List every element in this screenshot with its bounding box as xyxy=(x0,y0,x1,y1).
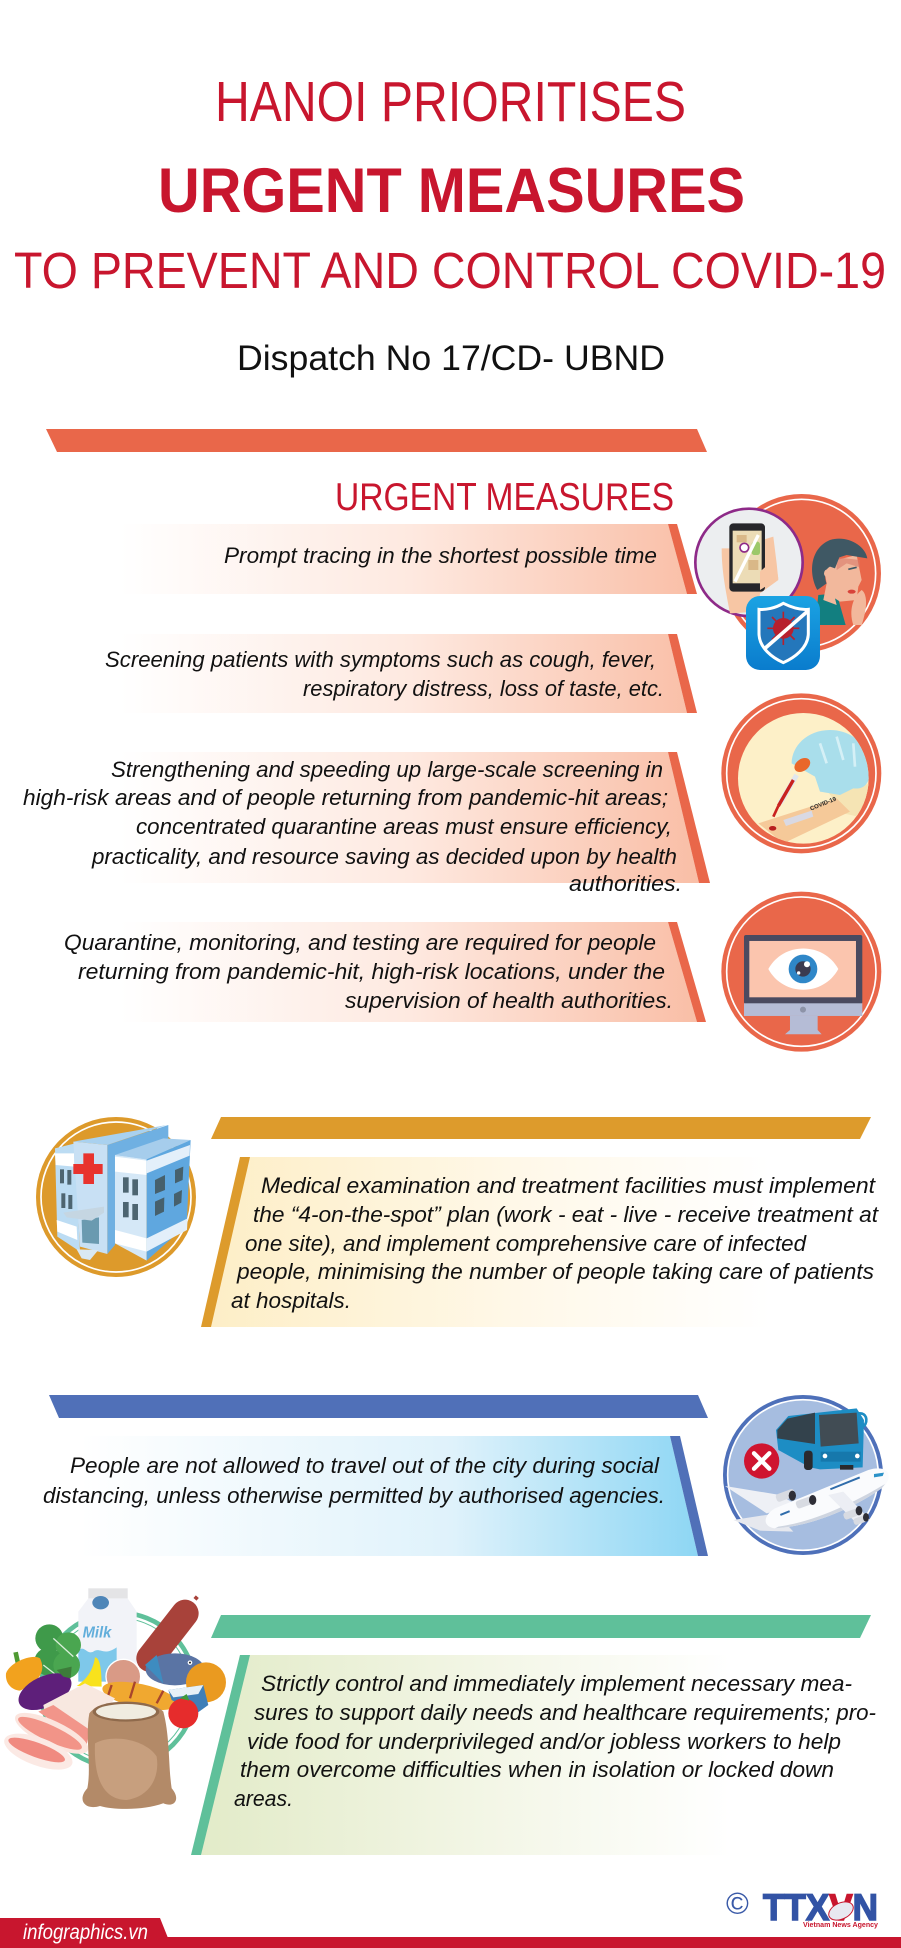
panel: quarantine and monitoring: supervision of health authorities. xyxy=(345,988,673,1013)
banner: orange section bar xyxy=(46,429,707,452)
panel: medical facilities: at hospitals. xyxy=(231,1288,351,1313)
panel: food and daily needs: areas. xyxy=(234,1786,293,1811)
panel: travel restriction xyxy=(43,1436,708,1556)
icon: hospital xyxy=(36,1117,196,1277)
panel: large-scale screening xyxy=(23,752,710,896)
subtitle: dispatch number: Dispatch No 17/CD- UBND xyxy=(237,339,665,378)
panel: large-scale screening: authorities. xyxy=(569,871,682,896)
icon: blood test kit: COVID-19 xyxy=(809,796,838,813)
heading: urgent measures: URGENT MEASURES xyxy=(335,476,674,519)
footer bar: infographics.vn xyxy=(23,1921,148,1944)
panel: quarantine and monitoring: Quarantine, monitoring, and testing are required for people xyxy=(64,930,656,955)
panel: travel restriction: People are not allowed to travel out of the city during social xyxy=(70,1453,660,1478)
panel: medical facilities: people, minimising the number of people taking care of patients xyxy=(236,1259,874,1284)
panel: travel restriction: distancing, unless otherwise permitted by authorised agencies. xyxy=(43,1483,665,1508)
panel: food and daily needs: Strictly control and immediately implement necessary mea- xyxy=(261,1671,852,1696)
icon: food basket: Milk xyxy=(83,1624,113,1641)
icon: tracing phone, coughing man, shield xyxy=(695,494,881,670)
panel: medical facilities xyxy=(201,1157,880,1327)
logo: TTXVN copyright: TTXVN xyxy=(763,1887,878,1928)
panel: food and daily needs: them overcome difficulties when in isolation or locked down xyxy=(240,1757,834,1782)
panel: screening patients: respiratory distress, loss of taste, etc. xyxy=(303,676,664,701)
panel: food and daily needs: vide food for underprivileged and/or jobless workers to help xyxy=(247,1729,841,1754)
title xyxy=(14,70,886,299)
panel: food and daily needs: sures to support daily needs and healthcare requirements; pro- xyxy=(254,1700,876,1725)
panel: prompt tracing: Prompt tracing in the shortest possible time xyxy=(224,543,657,568)
icon: blood test kit xyxy=(721,693,881,853)
banner: blue section bar xyxy=(49,1395,708,1418)
panel: medical facilities: one site), and implement comprehensive care of infected xyxy=(245,1231,807,1256)
logo: TTXVN copyright: Vietnam News Agency xyxy=(803,1920,879,1929)
logo: TTXVN copyright: © xyxy=(726,1886,749,1921)
icon: bus and plane not allowed xyxy=(723,1395,889,1555)
banner: green section bar xyxy=(211,1615,871,1638)
icon: food basket xyxy=(0,1588,226,1809)
title: URGENT MEASURES xyxy=(158,156,745,226)
title: HANOI PRIORITISES xyxy=(215,70,686,134)
panel: medical facilities: the “4-on-the-spot” plan (work - eat - live - receive treatment at xyxy=(253,1202,880,1227)
icon: monitor with eye xyxy=(721,892,881,1052)
panel: large-scale screening: practicality, and resource saving as decided upon by health xyxy=(91,844,677,869)
panel: screening patients xyxy=(100,634,697,713)
panel: large-scale screening: concentrated quarantine areas must ensure efficiency, xyxy=(136,814,672,839)
panel: large-scale screening: high-risk areas and of people returning from pandemic-hit areas; xyxy=(23,785,668,810)
panel: quarantine and monitoring: returning from pandemic-hit, high-risk locations, under the xyxy=(78,959,665,984)
panel: screening patients: Screening patients with symptoms such as cough, fever, xyxy=(105,647,656,672)
panel: food and daily needs xyxy=(191,1655,876,1855)
panel: quarantine and monitoring xyxy=(64,922,706,1022)
panel: medical facilities: Medical examination and treatment facilities must implement xyxy=(261,1173,877,1198)
panel: prompt tracing xyxy=(120,524,697,594)
banner: amber section bar xyxy=(211,1117,871,1139)
panel: large-scale screening: Strengthening and speeding up large-scale screening in xyxy=(111,757,663,782)
footer bar xyxy=(0,1918,901,1948)
